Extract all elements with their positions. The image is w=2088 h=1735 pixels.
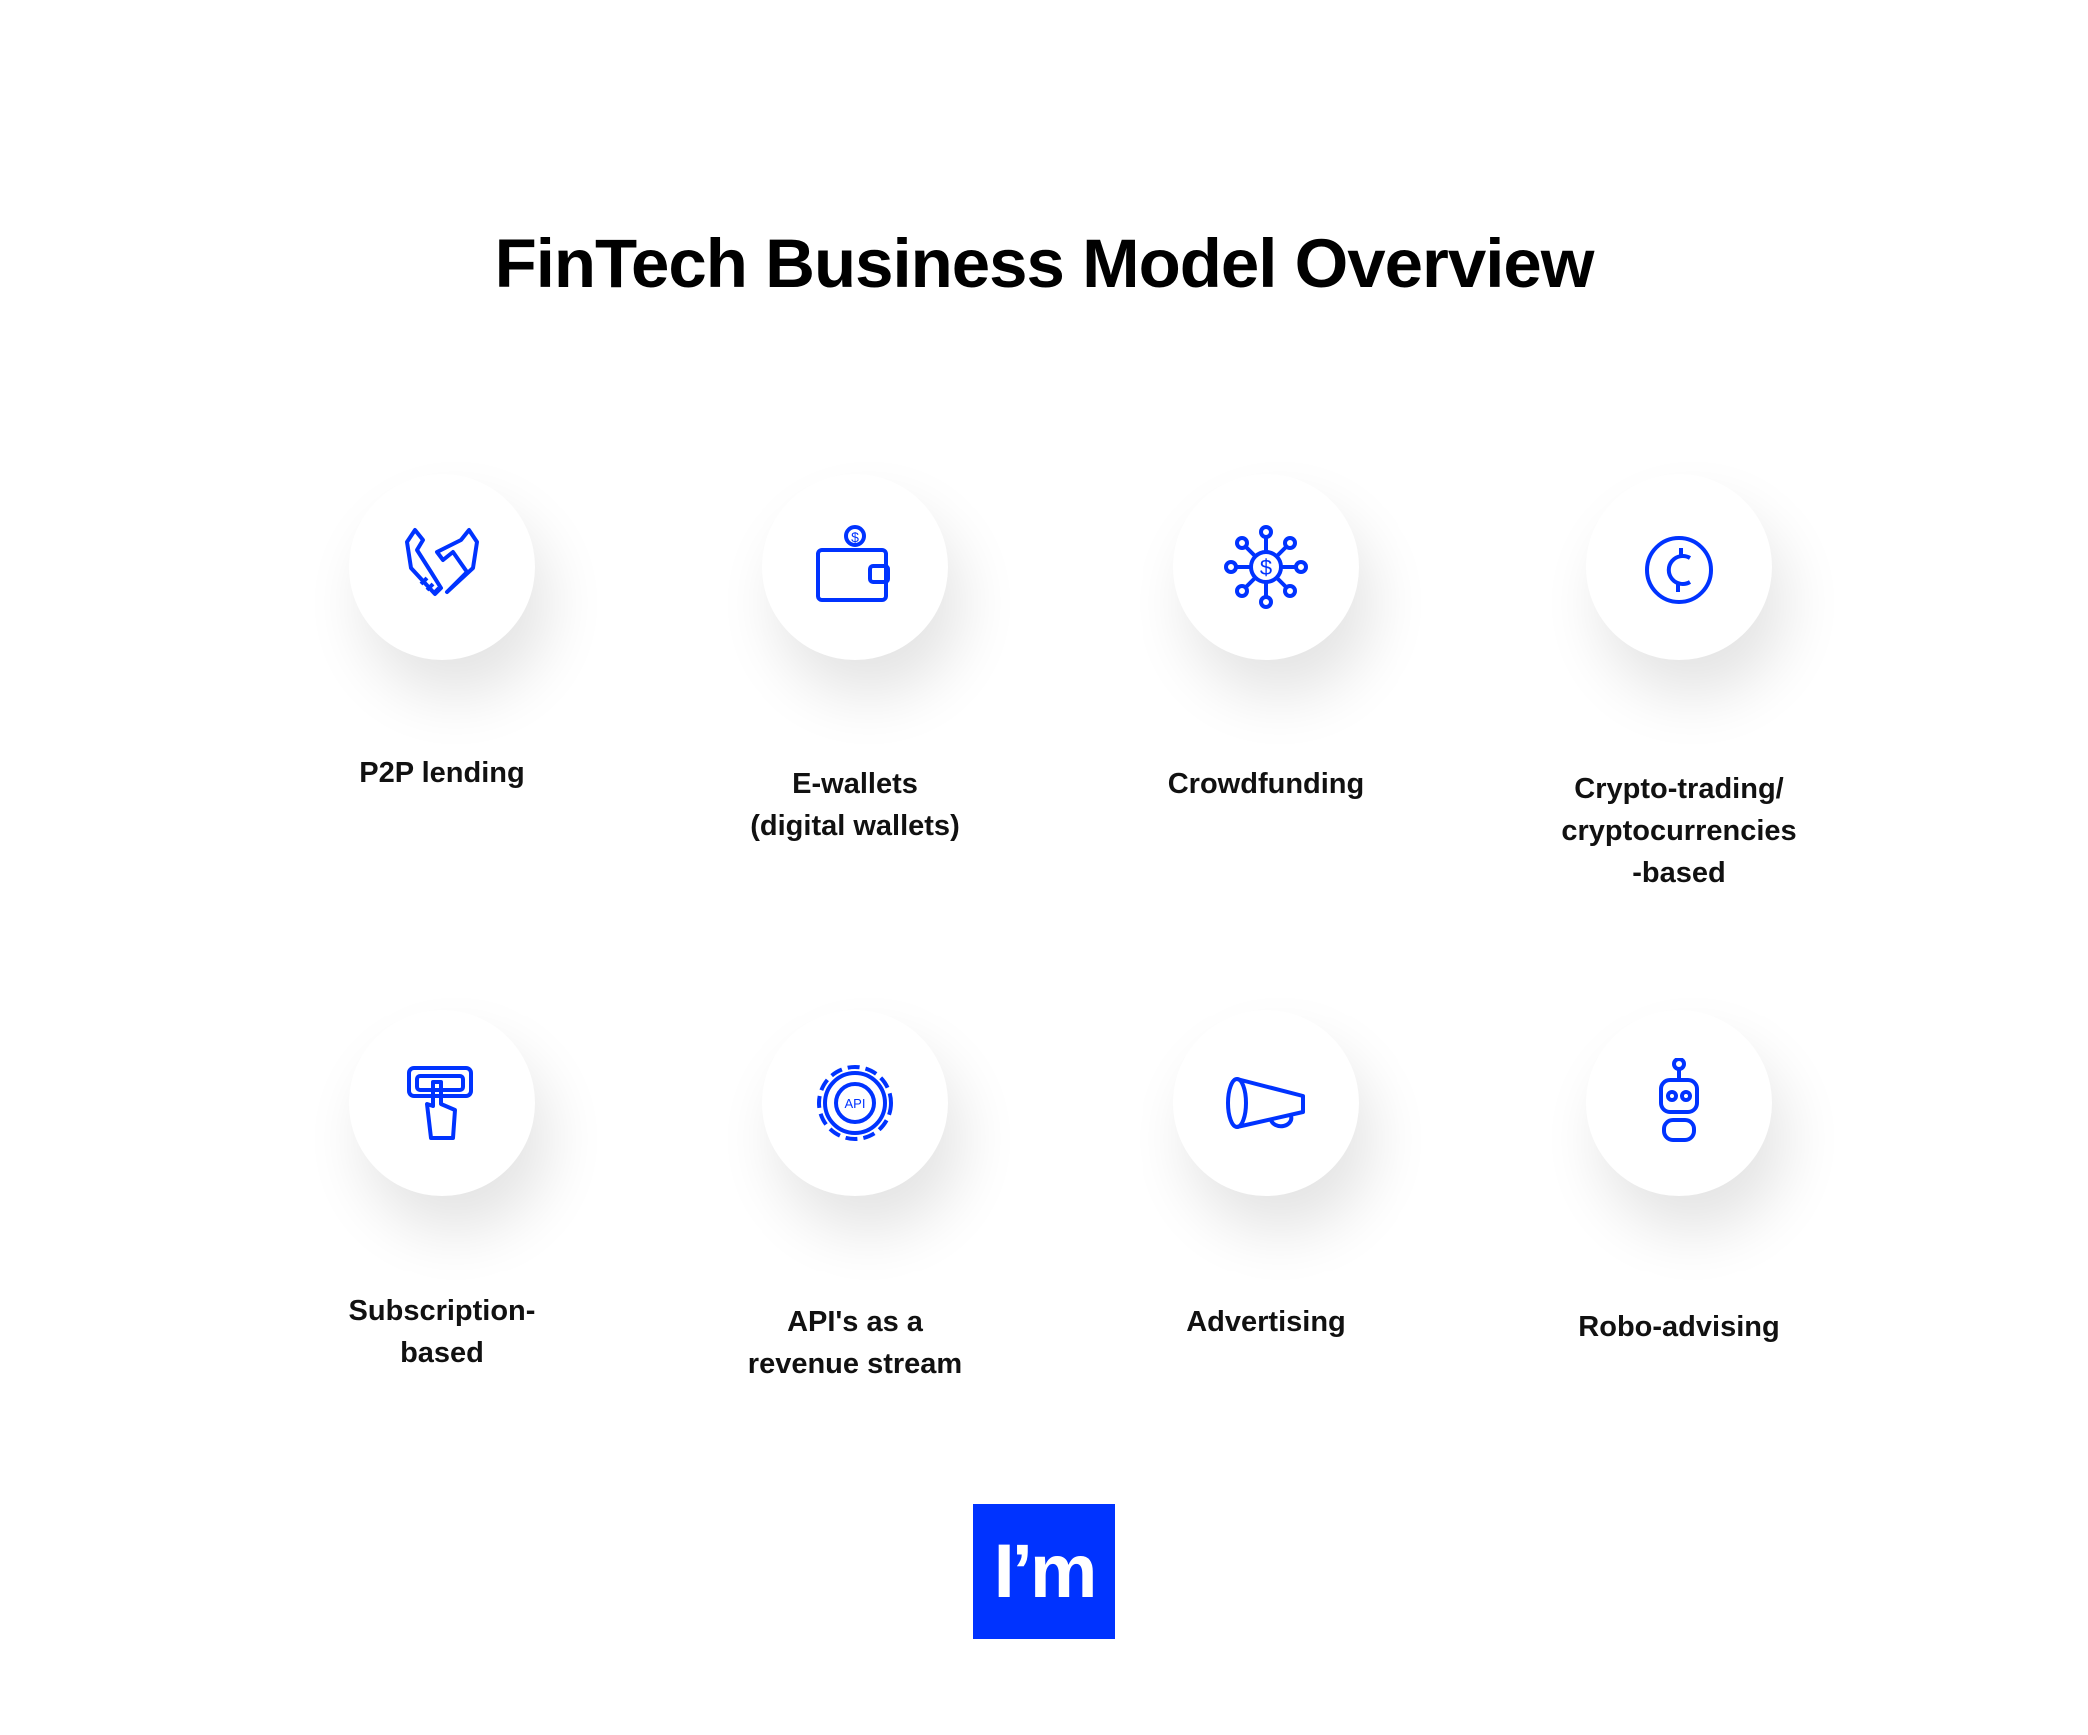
label bbox=[349, 1295, 535, 1369]
label: revenue stream bbox=[748, 1348, 962, 1380]
item: P2P lending bbox=[354, 528, 558, 789]
label: (digital wallets) bbox=[750, 810, 960, 842]
label: API's as a bbox=[787, 1306, 923, 1338]
icon: robot bbox=[1586, 1010, 1772, 1196]
item: Subscription bbox=[349, 1066, 558, 1369]
item: E-wallets bbox=[750, 525, 972, 842]
logo: I’m bbox=[994, 1529, 1094, 1614]
icon: megaphone bbox=[1173, 1010, 1359, 1196]
item: Crowdfunding bbox=[1168, 525, 1382, 800]
label: Robo-advising bbox=[1578, 1311, 1780, 1343]
icon: gear API bbox=[762, 1010, 948, 1196]
label bbox=[750, 768, 960, 842]
label bbox=[1561, 773, 1797, 889]
logo bbox=[973, 1504, 1115, 1639]
icon: gear API: API bbox=[845, 1096, 865, 1111]
icon: handshake bbox=[349, 474, 535, 660]
label: E-wallets bbox=[792, 768, 918, 800]
icon: network dollar: $ bbox=[1260, 555, 1272, 580]
icon: coin bbox=[1586, 474, 1772, 660]
item: API bbox=[748, 1065, 972, 1380]
icon: wallet bbox=[762, 474, 948, 660]
label: Crowdfunding bbox=[1168, 768, 1364, 800]
label: based bbox=[400, 1337, 484, 1369]
item: Robo-advising bbox=[1578, 1058, 1796, 1343]
label: Subscription- bbox=[349, 1295, 535, 1327]
icon: wallet: $ bbox=[851, 529, 859, 545]
label: Advertising bbox=[1186, 1306, 1346, 1338]
item: Crypto bbox=[1561, 531, 1797, 889]
label: cryptocurrencies bbox=[1561, 815, 1797, 847]
label: -based bbox=[1632, 857, 1726, 889]
icon: network dollar bbox=[1173, 474, 1359, 660]
icon: tap card bbox=[349, 1010, 535, 1196]
label bbox=[748, 1306, 962, 1380]
item: Advertising bbox=[1178, 1067, 1382, 1338]
label: Crypto-trading/ bbox=[1574, 773, 1784, 805]
title: FinTech Business Model Overview bbox=[495, 225, 1593, 302]
label: P2P lending bbox=[359, 757, 525, 789]
